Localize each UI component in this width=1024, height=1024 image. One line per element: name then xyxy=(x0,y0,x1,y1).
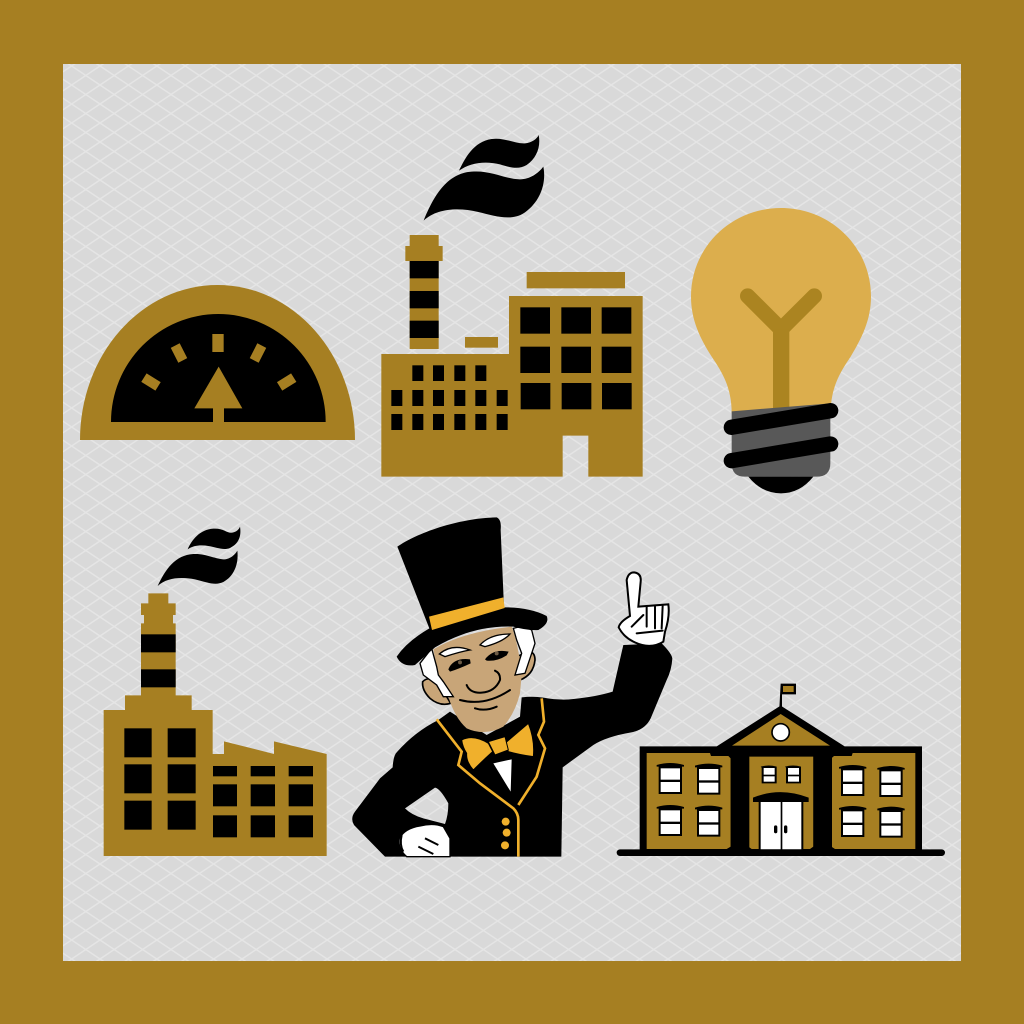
hat band xyxy=(429,597,505,630)
building body xyxy=(381,296,643,477)
lapel piping xyxy=(437,698,545,857)
raised glove xyxy=(619,572,669,646)
round window xyxy=(772,724,789,741)
roof vents xyxy=(465,337,498,348)
hat xyxy=(397,517,547,665)
icon: school building xyxy=(617,684,945,856)
centre windows xyxy=(761,765,801,783)
icon: factory with large windows xyxy=(381,135,643,477)
smoke xyxy=(158,527,240,586)
ground line xyxy=(617,849,945,856)
flag xyxy=(779,684,796,708)
building and chimney xyxy=(104,593,327,856)
smoke xyxy=(424,135,544,221)
chimney xyxy=(405,235,443,349)
jacket xyxy=(352,643,672,857)
left windows xyxy=(657,763,722,837)
icon: light bulb xyxy=(691,208,871,493)
right ear xyxy=(517,652,535,680)
buttons xyxy=(501,818,511,849)
walls and roof xyxy=(640,706,922,855)
entrance door xyxy=(753,792,809,850)
face xyxy=(433,627,522,732)
bow tie xyxy=(462,723,534,770)
shirt xyxy=(493,759,512,792)
large windows xyxy=(391,307,632,430)
right windows xyxy=(839,765,905,838)
hair xyxy=(420,648,453,697)
chimney stripes and windows xyxy=(124,634,313,837)
icon: gauge xyxy=(80,285,355,440)
left ear xyxy=(423,679,451,704)
columns xyxy=(731,755,749,850)
patterned grey panel xyxy=(63,64,961,961)
facial features xyxy=(439,634,510,710)
character: pointing mascot in top hat xyxy=(352,517,672,857)
icon: factory with sawtooth roof xyxy=(104,527,327,856)
lower glove xyxy=(399,824,450,857)
